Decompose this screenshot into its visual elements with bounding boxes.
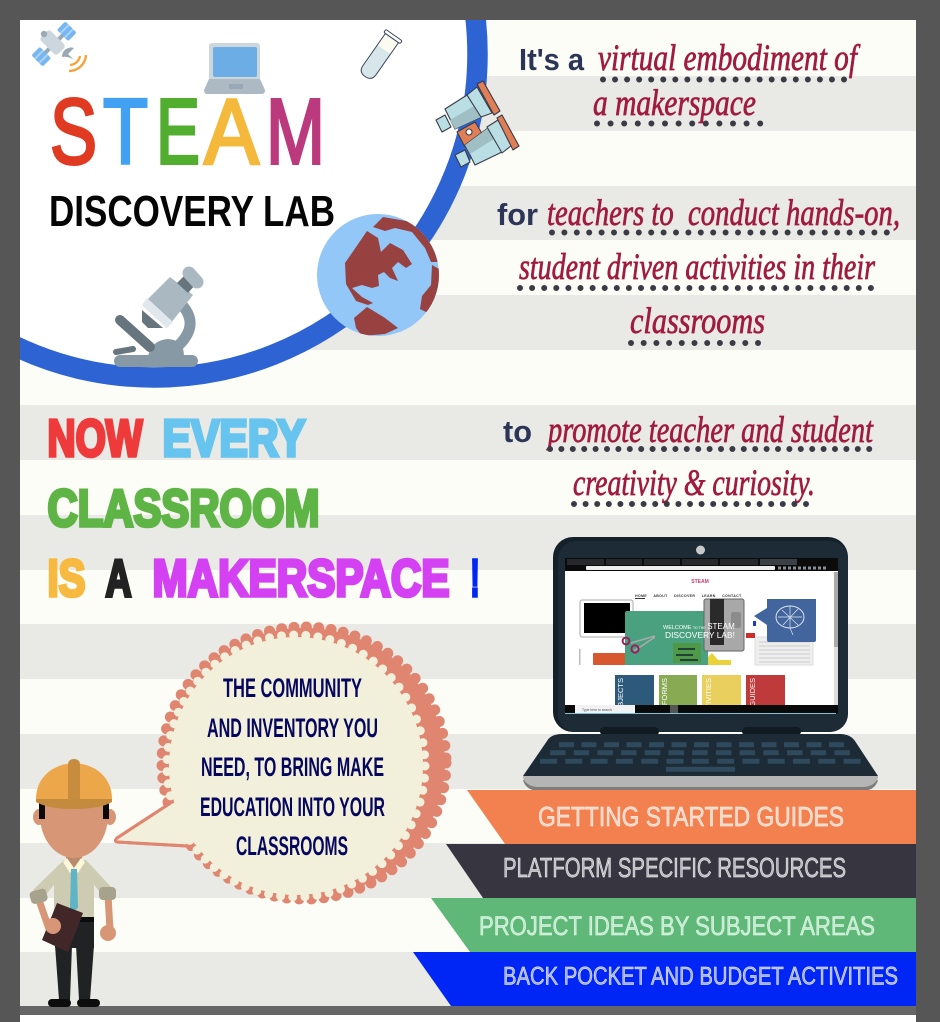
website category cards: PLATFORMS (660, 678, 669, 723)
website category cards: SUBJECTS (616, 678, 625, 717)
icon: binoculars (436, 81, 519, 167)
bubble text: THE COMMUNITY (223, 673, 362, 703)
title: STEAM: M (266, 80, 325, 184)
ribbon: getting started guides (467, 790, 916, 844)
ribbon: getting started guides: GETTING STARTED GUIDES (538, 801, 844, 832)
subtitle: discovery lab: DISCOVERY LAB (49, 187, 335, 236)
icon: globe (317, 214, 441, 336)
website category cards (615, 675, 785, 705)
text block: virtual embodiment (519, 38, 861, 124)
heading: now every classroom is a makerspace: IS (48, 550, 86, 608)
heading: now every classroom is a makerspace: ! (470, 550, 480, 608)
heading: now every classroom is a makerspace: A (106, 550, 132, 608)
ribbon: back pocket and budget activities (413, 952, 916, 1006)
title: STEAM (50, 80, 325, 184)
icon: test tube (357, 29, 402, 82)
text block: teachers: for (497, 197, 538, 232)
heading: now every classroom is a makerspace: EVERY (162, 410, 306, 468)
heading: now every classroom is a makerspace: NOW (48, 410, 143, 468)
icon: microscope (114, 273, 198, 367)
title: STEAM: S (50, 80, 97, 184)
laptop with website screenshot: Type here to search (582, 708, 612, 712)
website category cards: GUIDES (748, 678, 757, 707)
text block: creativity: creativity & curiosity. (573, 463, 815, 504)
bubble text (200, 673, 385, 861)
text block: teachers (497, 193, 900, 343)
bubble text: AND INVENTORY YOU (207, 713, 378, 743)
speech bubble (116, 627, 446, 899)
text block: creativity (503, 410, 877, 504)
bubble text: CLASSROOMS (236, 831, 348, 861)
title: STEAM: E (156, 80, 200, 184)
title: STEAM: T (103, 80, 148, 184)
icon: small laptop (204, 43, 265, 94)
title: STEAM: A (204, 80, 259, 184)
text block: virtual embodiment: a makerspace (593, 83, 756, 124)
website navigation: HOME ABOUT DISCOVER LEARN CONTACT (635, 594, 742, 598)
icon: satellite (27, 17, 86, 71)
text block: creativity: to (503, 414, 532, 449)
worker character (29, 759, 116, 1007)
laptop with website screenshot: DISCOVERY LAB! (665, 631, 735, 640)
heading: now every classroom is a makerspace: CLASSROOM (48, 480, 320, 538)
heading: now every classroom is a makerspace (48, 410, 480, 608)
ribbon: project ideas by subject areas (431, 898, 916, 952)
text block: virtual embodiment: It's a (519, 42, 585, 77)
text block: virtual embodiment: virtual embodiment of (598, 38, 861, 79)
bubble text: EDUCATION INTO YOUR (200, 792, 385, 822)
heading: now every classroom is a makerspace: MAKERSPACE (152, 550, 450, 608)
text block: teachers: classrooms (630, 301, 765, 342)
website category cards: ACTIVITIES (704, 678, 713, 719)
header circle panel (0, 0, 478, 378)
website welcome text: WELCOME TO THE STEAM (663, 622, 735, 631)
laptop with website screenshot (523, 537, 878, 791)
bubble text: NEED, TO BRING MAKE (201, 752, 384, 782)
ribbon: platform specific resources (446, 844, 916, 898)
website logo: STEAM (691, 579, 709, 585)
